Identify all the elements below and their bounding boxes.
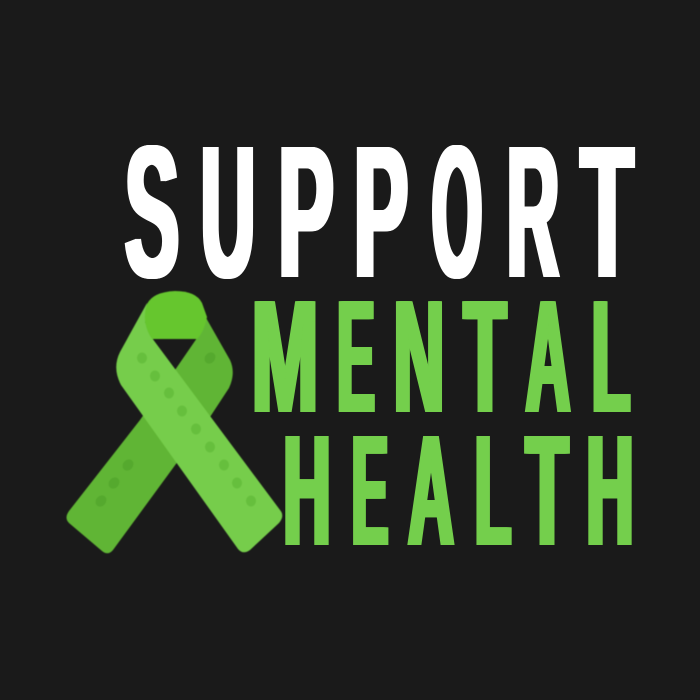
heading: SUPPORT: P [354,107,408,318]
ribbon back strand dots [93,350,218,509]
heading: SUPPORT: S [125,107,179,318]
ribbon front strand [116,303,282,552]
heading: MENTAL: M [251,267,318,447]
heading: MENTAL: E [338,267,375,447]
heading: MENTAL: L [592,267,631,447]
ribbon top loop [145,291,207,339]
heading: SUPPORT: P [278,107,333,318]
ribbon front dots [137,352,256,506]
heading: HEALTH: T [525,402,568,579]
heading: HEALTH: A [408,402,453,579]
ribbon back strand [66,316,233,553]
heading: MENTAL: N [394,267,444,447]
heading: MENTAL: A [526,267,570,447]
heading: MENTAL: T [463,267,506,447]
heading: HEALTH: L [475,402,510,579]
heading: HEALTH: H [586,402,633,579]
heading: HEALTH: E [352,402,388,579]
heading: SUPPORT: R [506,107,559,318]
heading: HEALTH: H [283,402,330,579]
heading: SUPPORT: O [432,107,482,318]
heading: SUPPORT: T [580,107,633,318]
heading: SUPPORT: U [200,107,255,318]
